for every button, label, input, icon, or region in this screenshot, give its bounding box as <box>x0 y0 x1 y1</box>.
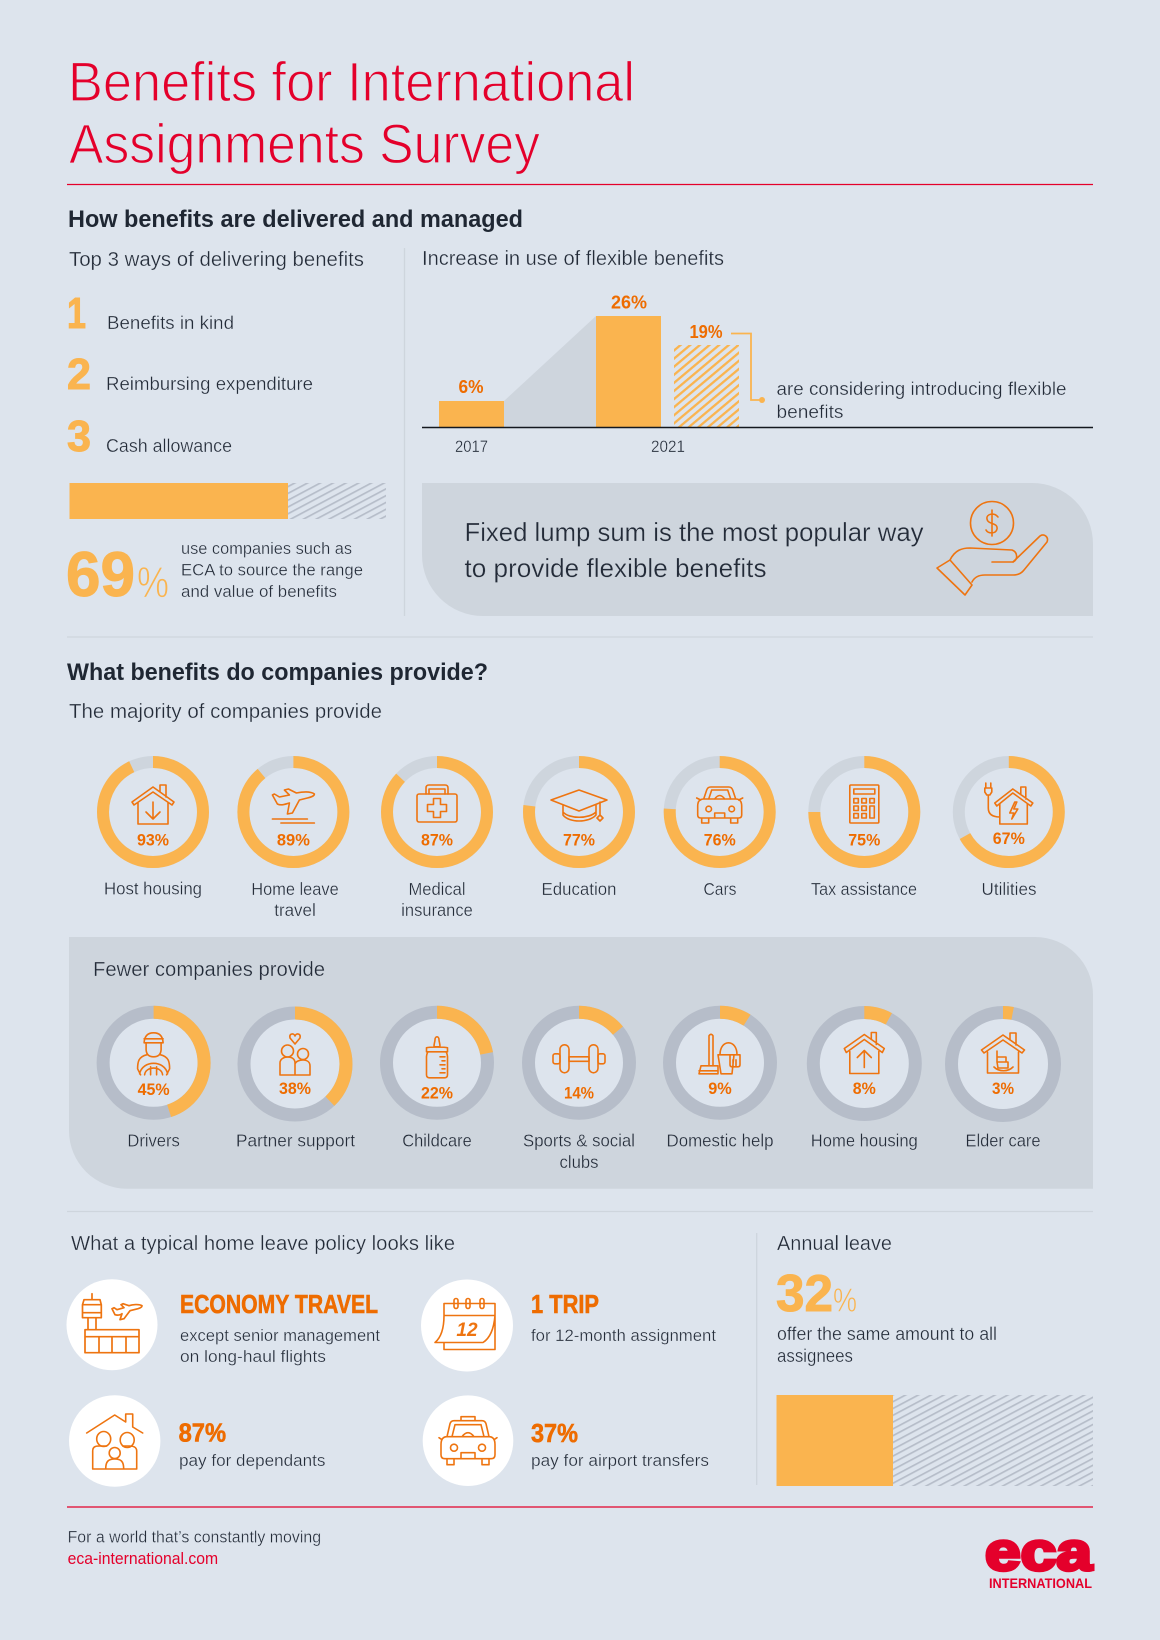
icon: house with rocking chair <box>982 1033 1024 1073</box>
icon: house up arrow <box>844 1032 884 1074</box>
callout: considering flexible benefits: are considering introducing flexible <box>776 379 1066 399</box>
donut: host housing 93%: Host housing <box>104 879 202 899</box>
panel: typical home leave policy <box>66 1233 716 1487</box>
policy: economy travel: on long-haul flights <box>180 1347 326 1366</box>
donut: utilities 67%: 67% <box>993 829 1025 848</box>
panel: increase in use of flexible benefits <box>422 248 1093 616</box>
item 3: Cash allowance <box>106 436 232 456</box>
item 2: Reimbursing expenditure <box>106 374 313 394</box>
subheading: home leave policy: What a typical home leave policy looks like <box>71 1233 455 1255</box>
panel: fixed lump sum: Fixed lump sum is the most popular way <box>464 517 924 547</box>
subheading: increase: Increase in use of flexible benefits <box>422 248 724 270</box>
donut: home housing 8%: 8% <box>853 1079 876 1098</box>
subheading: annual leave: Annual leave <box>777 1233 892 1255</box>
policy: 37% pay for airport transfers: 37% <box>531 1418 578 1448</box>
icon: airport tower and plane <box>82 1294 142 1353</box>
donut: childcare 22% <box>386 1012 488 1151</box>
panel: fixed lump sum <box>422 483 1093 616</box>
donut: host housing 93% <box>103 762 203 899</box>
icon: calculator <box>850 785 879 823</box>
icon: calendar <box>435 1298 495 1350</box>
stat: 69 percent <box>66 539 363 610</box>
donut: tax assistance 75% <box>811 762 917 899</box>
bar: 32 percent <box>776 1395 1093 1486</box>
subheading: majority: The majority of companies provide <box>69 701 382 723</box>
donut: cars 76%: 76% <box>704 830 736 850</box>
text: same amount <box>777 1324 997 1366</box>
footer text: For a world that’s constantly moving <box>68 1529 321 1547</box>
bar chart: 6% <box>458 377 484 397</box>
donut: medical insurance 87%: 87% <box>421 830 453 850</box>
title <box>68 50 635 175</box>
stat: 32 percent: 32 <box>776 1265 833 1323</box>
item 2: 2 <box>67 350 91 399</box>
donut: sports and social clubs 14%: 14% <box>564 1084 594 1103</box>
icon: house down arrow <box>132 785 174 824</box>
donut: host housing 93%: 93% <box>137 830 169 850</box>
donut: cars 76% <box>670 762 770 899</box>
bar chart: 19% <box>690 322 722 342</box>
donut: tax assistance 75%: Tax assistance <box>811 879 917 899</box>
policy: economy travel: except senior management <box>180 1326 380 1345</box>
bar chart: 2021 <box>651 437 685 456</box>
item 3: 3 <box>67 412 91 461</box>
donut: medical insurance 87%: insurance <box>401 900 473 920</box>
donut: home housing 8% <box>811 1012 918 1151</box>
policy: 1 trip <box>421 1280 716 1372</box>
donut: home leave travel 89%: 89% <box>277 830 310 850</box>
donut: domestic help 9%: Domestic help <box>666 1131 774 1151</box>
bar chart: 26% <box>611 292 647 312</box>
icon: graduation cap <box>551 790 607 821</box>
donut: partner support 38%: 38% <box>279 1079 311 1098</box>
text: same amount: offer the same amount to all <box>777 1324 997 1344</box>
icon: family in house <box>87 1414 143 1469</box>
stat: 69 percent: 69 <box>66 540 135 610</box>
panel: fixed lump sum: to provide flexible benefits <box>464 553 766 583</box>
panel: fewer companies provide <box>69 937 1093 1189</box>
donut: home leave travel 89%: Home leave <box>251 879 339 899</box>
title: Benefits for International <box>68 50 635 113</box>
policy: economy travel <box>66 1279 380 1370</box>
item 1: Benefits in kind <box>107 313 234 333</box>
icon: house with plug <box>985 783 1033 824</box>
icon: plane taking off <box>272 789 314 823</box>
bar: 69 percent <box>70 483 386 519</box>
donut: drivers 45%: 45% <box>138 1080 170 1099</box>
stat: 69 percent: use companies such as <box>181 539 352 558</box>
donut: education 77%: 77% <box>563 830 595 850</box>
donut: domestic help 9% <box>666 1012 774 1151</box>
policy: 87% pay for dependants: pay for dependants <box>179 1451 326 1470</box>
donut: childcare 22%: 22% <box>421 1084 453 1103</box>
footer text <box>68 1529 321 1568</box>
donut: tax assistance 75%: 75% <box>848 830 880 850</box>
logo: eca international: eca <box>985 1522 1093 1582</box>
donut: partner support 38%: Partner support <box>236 1131 355 1151</box>
donut: elder care 3%: 3% <box>992 1079 1014 1098</box>
icon: taxi <box>439 1417 497 1465</box>
policy: 37% pay for airport transfers <box>423 1395 709 1486</box>
donut: elder care 3% <box>952 1012 1054 1151</box>
bar chart <box>422 292 1093 456</box>
item 1 <box>67 289 234 338</box>
donut: sports and social clubs 14%: clubs <box>560 1152 599 1172</box>
text: same amount: assignees <box>777 1346 853 1366</box>
icon: car <box>697 787 743 823</box>
item 1: 1 <box>67 289 86 338</box>
donut: drivers 45% <box>103 1012 204 1151</box>
bar chart: 2017 <box>455 437 488 456</box>
policy: 87% pay for dependants: 87% <box>179 1418 226 1448</box>
item 3 <box>67 412 232 461</box>
logo: eca international: INTERNATIONAL <box>989 1575 1092 1591</box>
text: 12 on calendar: 12 <box>456 1320 478 1341</box>
donut: utilities 67%: Utilities <box>982 879 1037 899</box>
donut: sports and social clubs 14% <box>523 1012 635 1172</box>
panel: top 3 ways of delivering benefits <box>66 249 386 610</box>
stat: 69 percent: % <box>137 558 169 607</box>
policy: 1 trip: 1 TRIP <box>531 1289 599 1319</box>
donut: elder care 3%: Elder care <box>966 1131 1040 1151</box>
donut: childcare 22%: Childcare <box>402 1131 472 1151</box>
donut: domestic help 9%: 9% <box>708 1079 732 1098</box>
icon: broom and bucket <box>699 1034 740 1074</box>
title: Assignments Survey <box>69 112 540 175</box>
item 2 <box>67 350 313 399</box>
icon: driver <box>138 1033 170 1075</box>
policy: 37% pay for airport transfers: pay for airport transfers <box>531 1451 709 1470</box>
donut: partner support 38% <box>236 1013 355 1151</box>
icon: couple with heart <box>280 1034 310 1075</box>
donut: cars 76%: Cars <box>704 879 737 899</box>
donut: medical insurance 87% <box>387 762 487 920</box>
donut: medical insurance 87%: Medical <box>408 879 466 899</box>
icon: dumbbell <box>553 1045 605 1073</box>
donut: home housing 8%: Home housing <box>811 1131 918 1151</box>
donut: education 77% <box>529 762 629 899</box>
donut: home leave travel 89% <box>243 762 343 920</box>
callout connector <box>731 334 765 403</box>
heading: how benefits are delivered: How benefits are delivered and managed <box>68 206 523 233</box>
donut: sports and social clubs 14%: Sports & social <box>523 1131 635 1151</box>
subheading: top 3 ways: Top 3 ways of delivering benefits <box>69 249 364 271</box>
policy: 1 trip: for 12-month assignment <box>531 1326 716 1345</box>
donut: education 77%: Education <box>542 879 616 899</box>
stat: 69 percent: and value of benefits <box>181 582 337 601</box>
stat: 69 percent: ECA to source the range <box>181 560 363 580</box>
donut: utilities 67% <box>959 762 1059 899</box>
icon: baby bottle <box>426 1037 448 1078</box>
policy: 87% pay for dependants <box>69 1395 326 1487</box>
callout: considering flexible benefits <box>776 379 1066 422</box>
panel: annual leave <box>776 1233 1093 1486</box>
donut: drivers 45%: Drivers <box>127 1131 180 1151</box>
footer text: eca-international.com <box>68 1550 218 1568</box>
callout: considering flexible benefits: benefits <box>776 402 844 422</box>
donut: home leave travel 89%: travel <box>274 900 316 920</box>
icon: hand with coin <box>937 502 1047 595</box>
subheading: fewer: Fewer companies provide <box>93 959 325 981</box>
policy: economy travel: ECONOMY TRAVEL <box>180 1289 378 1319</box>
icon: medical case <box>417 785 457 822</box>
stat: 32 percent: % <box>833 1282 857 1319</box>
heading: what benefits: What benefits do companies provide? <box>67 659 488 686</box>
